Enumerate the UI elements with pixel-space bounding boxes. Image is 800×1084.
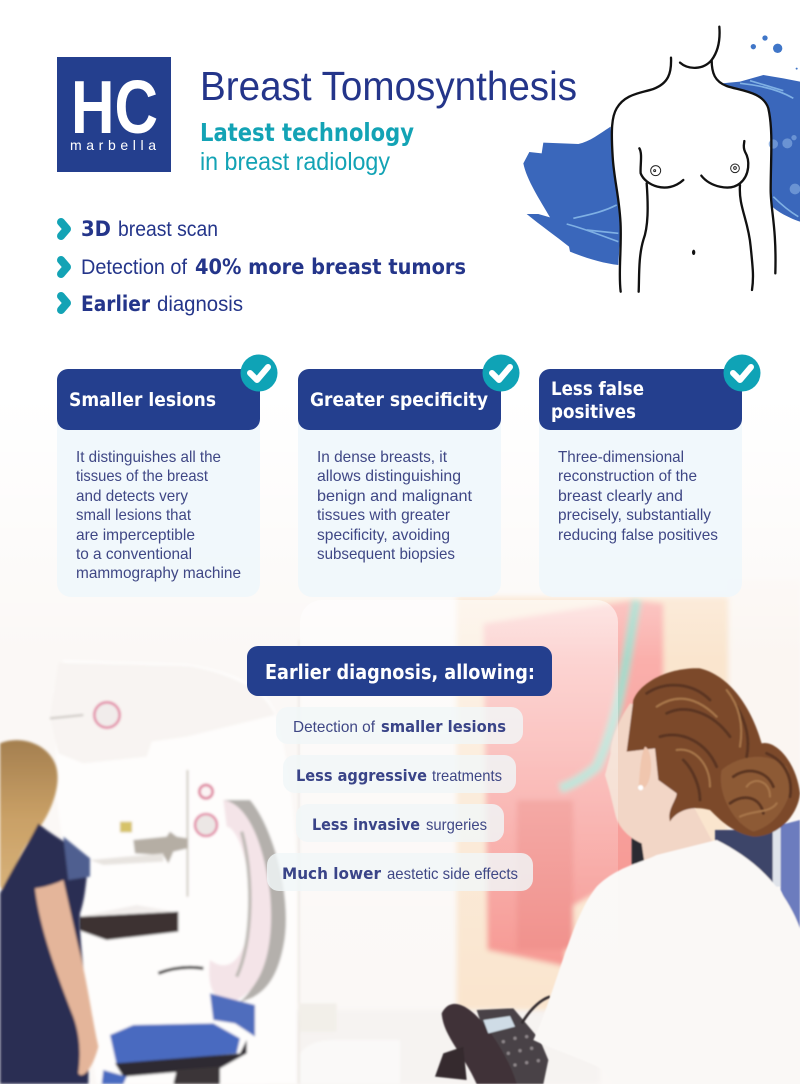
logo: HC marbella: HC	[71, 65, 158, 149]
item: detection of smaller lesions: smaller lesions	[381, 717, 506, 736]
subtitle: in breast radiology	[200, 148, 390, 176]
item: much lower aesthetic side effects	[267, 853, 533, 891]
panel: less false positives: reconstruction of the	[558, 468, 697, 485]
heading: earlier diagnosis, allowing: Earlier diagnosis, allowing:	[265, 660, 535, 684]
panel: smaller lesions: tissues of the breast	[76, 468, 209, 485]
panel: less false positives: positives	[551, 401, 636, 423]
item: less aggressive treatments	[283, 755, 516, 793]
panel: smaller lesions: and detects very	[76, 488, 188, 505]
panel: smaller lesions: It distinguishes all the	[76, 449, 221, 466]
photo: nurse at right	[533, 668, 800, 1084]
photo: white fade toward the top	[0, 0, 800, 660]
logo: HC marbella: marbella	[70, 137, 156, 153]
item: detection of smaller lesions: Detection of	[293, 719, 376, 736]
bullet: 3D breast scan	[61, 217, 218, 241]
item: less invasive surgeries	[296, 804, 504, 842]
panel: smaller lesions: are imperceptible	[76, 527, 195, 544]
bullet: 3D breast scan: breast scan	[118, 218, 218, 241]
panel: greater specificity: benign and malignant	[317, 488, 473, 505]
item: less invasive surgeries: surgeries	[426, 817, 487, 834]
item: less invasive surgeries: Less invasive	[312, 815, 420, 834]
bullet: detection of 40% more breast tumors: 40% more breast tumors	[195, 255, 466, 279]
panel: less false positives: Less false	[551, 378, 644, 400]
panel: greater specificity: In dense breasts, it	[317, 449, 448, 466]
logo: HC marbella	[57, 57, 171, 172]
title: Breast Tomosynthesis	[200, 63, 577, 109]
photo: telephone on the desk	[435, 997, 550, 1084]
panel: less false positives: Three-dimensional	[558, 449, 684, 466]
subtitle	[200, 118, 414, 176]
bullet: 3D breast scan: 3D	[81, 217, 111, 241]
panel: greater specificity: allows distinguishing	[317, 468, 461, 485]
bullet: earlier diagnosis	[61, 292, 243, 316]
panel: smaller lesions: mammography machine	[76, 565, 241, 582]
panel: less false positives: breast clearly and	[558, 488, 683, 505]
photo: mammography machine	[50, 640, 400, 1084]
illustration: female torso with blue brush strokes	[523, 27, 800, 292]
bullet: earlier diagnosis: Earlier	[81, 292, 151, 316]
item: less aggressive treatments: Less aggressive	[296, 766, 427, 785]
panel: smaller lesions: small lesions that	[76, 507, 192, 524]
subtitle: Latest technology	[200, 118, 414, 147]
photo: woman at left	[0, 740, 98, 1084]
photo: translucent glass panel	[300, 600, 618, 1000]
panel: greater specificity	[298, 354, 520, 597]
panel: smaller lesions	[57, 354, 278, 597]
item: detection of smaller lesions	[276, 707, 523, 744]
photo: wall and artwork	[267, 580, 800, 1084]
bullet: earlier diagnosis: diagnosis	[157, 293, 243, 316]
panel: less false positives	[539, 354, 760, 597]
item: much lower aesthetic side effects: aestetic side effects	[387, 866, 518, 883]
panel: smaller lesions: to a conventional	[76, 546, 192, 563]
bullet: detection of 40% more breast tumors	[61, 255, 466, 279]
bullet: detection of 40% more breast tumors: Detection of	[81, 256, 187, 279]
panel: greater specificity: specificity, avoiding	[317, 527, 450, 544]
panel: greater specificity: Greater specificity	[310, 389, 489, 411]
panel: greater specificity: tissues with greater	[317, 507, 451, 524]
item: less aggressive treatments: treatments	[432, 768, 502, 785]
item: much lower aesthetic side effects: Much lower	[282, 864, 381, 883]
panel: greater specificity: subsequent biopsies	[317, 546, 455, 563]
heading: earlier diagnosis, allowing	[247, 646, 552, 696]
bullet list	[61, 217, 466, 316]
panel: less false positives: reducing false positives	[558, 527, 718, 544]
panel: earlier diagnosis	[247, 646, 552, 891]
panel: smaller lesions: Smaller lesions	[69, 389, 216, 411]
panel: less false positives: precisely, substantially	[558, 507, 711, 524]
